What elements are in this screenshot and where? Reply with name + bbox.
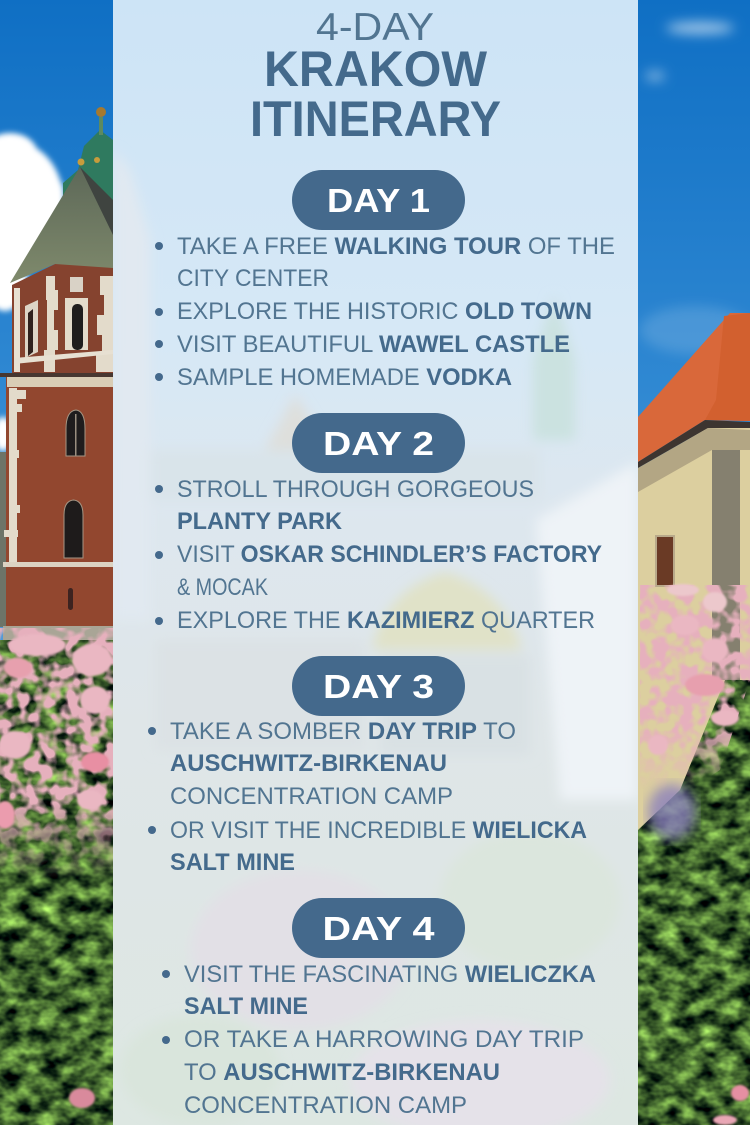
ghost of castle seen through panel bbox=[113, 150, 638, 1125]
list: day 4 items: VISIT THE FASCINATING WIELICZKA bbox=[184, 961, 596, 988]
list: day 4 items: SALT MINE bbox=[184, 993, 308, 1020]
heading: KRAKOW: KRAKOW bbox=[264, 41, 488, 97]
list: day 1 items: SAMPLE HOMEMADE VODKA bbox=[177, 364, 512, 391]
roses bbox=[0, 584, 750, 1125]
quoins and upper windows bbox=[14, 288, 20, 372]
brick tower bbox=[0, 107, 114, 651]
list: day 4 items: TO AUSCHWITZ-BIRKENAU bbox=[184, 1059, 500, 1086]
list: day 2 items: & MOCAK bbox=[177, 574, 268, 601]
list: day 1 items: CITY CENTER bbox=[177, 265, 329, 292]
foliage bbox=[0, 640, 750, 1125]
list: day 3 items: AUSCHWITZ-BIRKENAU bbox=[170, 750, 447, 777]
tower windows bbox=[66, 410, 85, 456]
badge: day 2 bbox=[292, 413, 465, 473]
day 2 section bbox=[155, 413, 602, 634]
badge: day 2: DAY 2 bbox=[323, 425, 434, 462]
list: day 2 items: VISIT OSKAR SCHINDLER’S FACTORY bbox=[177, 541, 602, 568]
badge: day 3 bbox=[292, 656, 465, 716]
roof bbox=[10, 167, 113, 283]
list: day 1 items: VISIT BEAUTIFUL WAWEL CASTLE bbox=[177, 331, 570, 358]
right building with orange roof bbox=[638, 313, 750, 860]
list: day 4 items bbox=[162, 961, 596, 1119]
badge: day 4 bbox=[292, 898, 465, 958]
list: day 1 items: TAKE A FREE WALKING TOUR OF THE bbox=[177, 233, 615, 260]
badge: day 1: DAY 1 bbox=[327, 182, 430, 219]
badge: day 1 bbox=[292, 170, 465, 230]
list: day 1 items bbox=[155, 233, 615, 391]
list: day 2 items: STROLL THROUGH GORGEOUS bbox=[177, 476, 534, 503]
sky bbox=[0, 0, 750, 700]
list: day 3 items: CONCENTRATION CAMP bbox=[170, 783, 453, 810]
day 1 section bbox=[155, 170, 615, 391]
heading: ITINERARY: ITINERARY bbox=[250, 91, 501, 147]
badge: day 4: DAY 4 bbox=[322, 910, 435, 947]
day 3 section bbox=[148, 656, 587, 876]
quoins lower bbox=[9, 388, 17, 564]
list: day 3 items: OR VISIT THE INCREDIBLE WIELICKA bbox=[170, 817, 587, 844]
list: day 3 items: SALT MINE bbox=[170, 849, 295, 876]
building left edge bbox=[0, 452, 8, 627]
green dome bbox=[63, 130, 113, 240]
title bbox=[250, 6, 501, 147]
cornice bbox=[0, 373, 114, 377]
lavender bbox=[648, 784, 696, 840]
day 4 section bbox=[162, 898, 596, 1119]
list: day 4 items: CONCENTRATION CAMP bbox=[184, 1092, 467, 1119]
clouds bbox=[0, 133, 64, 451]
translucent panel bbox=[113, 0, 638, 1125]
tower body bbox=[6, 376, 114, 626]
list: day 3 items bbox=[148, 718, 587, 876]
list: day 2 items bbox=[155, 476, 602, 634]
list: day 3 items: TAKE A SOMBER DAY TRIP TO bbox=[170, 718, 516, 745]
list: day 2 items: EXPLORE THE KAZIMIERZ QUARTER bbox=[177, 607, 595, 634]
list: day 1 items: EXPLORE THE HISTORIC OLD TOWN bbox=[177, 298, 592, 325]
list: day 2 items: PLANTY PARK bbox=[177, 508, 343, 535]
subtitle: 4-DAY: 4-DAY bbox=[316, 6, 434, 49]
badge: day 3: DAY 3 bbox=[323, 668, 434, 705]
list: day 4 items: OR TAKE A HARROWING DAY TRIP bbox=[184, 1026, 584, 1053]
